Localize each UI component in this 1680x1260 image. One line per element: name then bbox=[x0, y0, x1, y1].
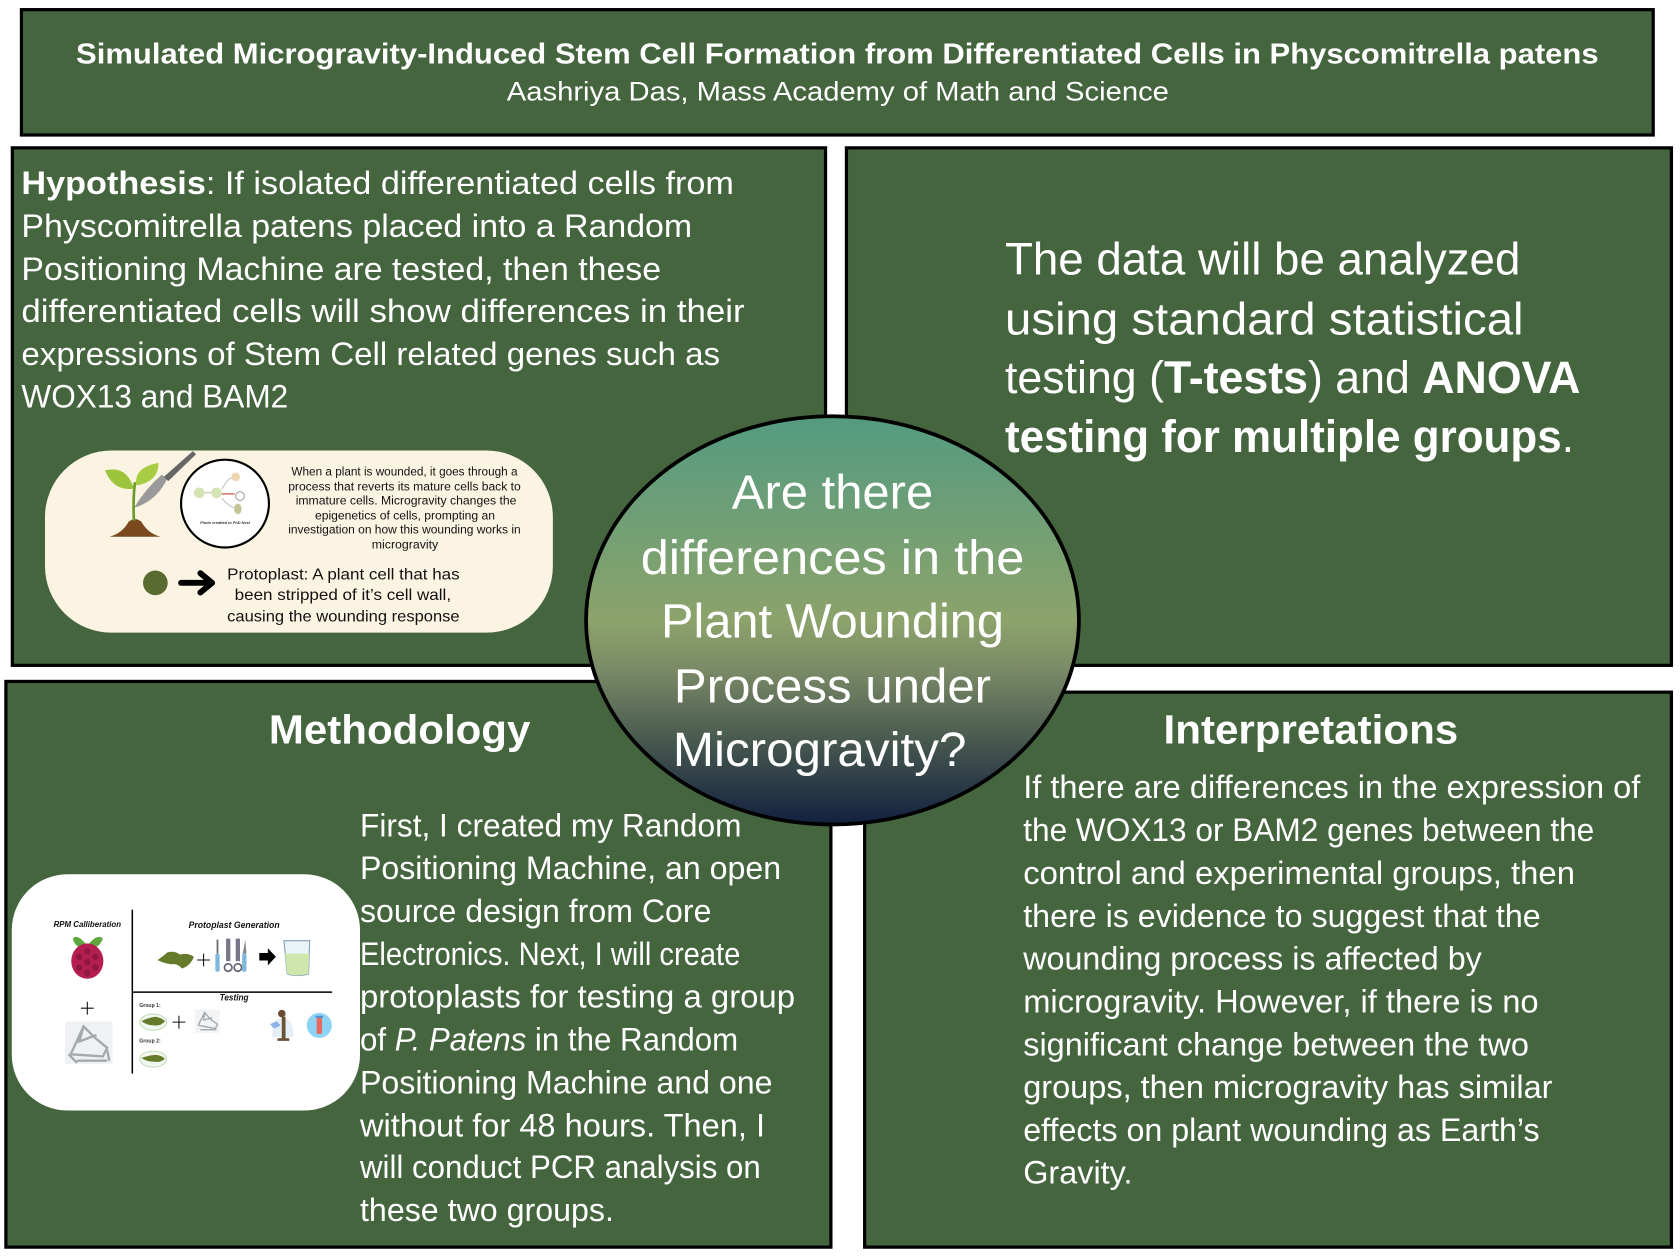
title: Simulated Microgravity-Induced Stem Cell Formation from Differentiated Cells in Physcomitrella patens bbox=[76, 39, 1599, 71]
icon: beaker bbox=[284, 941, 310, 976]
methodology text: these two groups. bbox=[360, 1192, 614, 1228]
wounding explanation text bbox=[288, 466, 521, 552]
wounding explanation text: process that reverts its mature cells back to bbox=[288, 481, 521, 494]
wounding explanation text: investigation on how this wounding works in bbox=[288, 524, 521, 537]
wounding explanation text: microgravity bbox=[372, 539, 438, 552]
data analysis text bbox=[1005, 233, 1580, 462]
interpretations text: wounding process is affected by bbox=[1022, 941, 1482, 977]
hypothesis text: Positioning Machine are tested, then these bbox=[21, 251, 661, 287]
data analysis text: testing (T-tests) and ANOVA bbox=[1005, 352, 1580, 403]
interpretations heading: Interpretations bbox=[1164, 707, 1458, 753]
icon: surgical tools bbox=[215, 939, 246, 972]
group 2 label: Group 2: bbox=[139, 1038, 161, 1044]
plus sign bbox=[81, 1002, 94, 1015]
wounding explanation text: immature cells. Microgravity changes the bbox=[296, 495, 517, 508]
methodology text: Positioning Machine, an open bbox=[360, 850, 781, 886]
panel: methodology bbox=[6, 681, 831, 1247]
central question text: Microgravity? bbox=[673, 723, 966, 777]
hypothesis text bbox=[21, 165, 745, 415]
plus sign bbox=[172, 1016, 185, 1029]
icon: seedling bbox=[105, 463, 161, 537]
header panel bbox=[21, 10, 1653, 135]
central question text: Plant Wounding bbox=[661, 595, 1004, 649]
hypothesis text: expressions of Stem Cell related genes such as bbox=[21, 336, 720, 372]
central question text bbox=[641, 465, 1024, 777]
icon: petri dish bbox=[140, 1014, 167, 1030]
data analysis text: The data will be analyzed bbox=[1005, 233, 1520, 284]
interpretations text: effects on plant wounding as Earth’s bbox=[1023, 1112, 1540, 1148]
author line: Aashriya Das, Mass Academy of Math and Science bbox=[507, 77, 1169, 107]
icon: small machine bbox=[195, 1009, 220, 1033]
methodology diagram card bbox=[12, 874, 360, 1111]
methodology text bbox=[359, 807, 795, 1228]
interpretations text: control and experimental groups, then bbox=[1023, 855, 1575, 891]
icon: moss bbox=[158, 952, 194, 969]
methodology text: without for 48 hours. Then, I bbox=[359, 1107, 765, 1143]
central question text: differences in the bbox=[641, 531, 1024, 585]
wounding explanation text: epigenetics of cells, prompting an bbox=[315, 510, 495, 523]
plus sign bbox=[197, 954, 210, 966]
panel: interpretations bbox=[865, 692, 1671, 1247]
wound healing diagram circle bbox=[181, 460, 269, 548]
interpretations text: the WOX13 or BAM2 genes between the bbox=[1023, 812, 1594, 848]
methodology text: Electronics. Next, I will create bbox=[360, 936, 740, 972]
wound healing diagram circle: Photo credited to PhD Nest bbox=[200, 521, 251, 525]
icon: scientist bbox=[270, 1010, 294, 1041]
protoplast definition: causing the wounding response bbox=[227, 607, 460, 625]
protoplast definition: Protoplast: A plant cell that has bbox=[227, 566, 460, 584]
methodology text: of P. Patens in the Random bbox=[360, 1022, 738, 1058]
wounding explanation text: When a plant is wounded, it goes through a bbox=[291, 466, 518, 479]
data analysis text: testing for multiple groups. bbox=[1005, 411, 1574, 462]
methodology text: Positioning Machine and one bbox=[360, 1064, 772, 1100]
interpretations text: groups, then microgravity has similar bbox=[1023, 1069, 1553, 1105]
methodology text: First, I created my Random bbox=[360, 807, 741, 843]
panel: data analysis bbox=[846, 148, 1671, 665]
interpretations text: there is evidence to suggest that the bbox=[1023, 898, 1541, 934]
icon: protoplast dot bbox=[143, 571, 168, 595]
interpretations text: If there are differences in the expression of bbox=[1023, 769, 1640, 805]
methodology text: source design from Core bbox=[360, 893, 711, 929]
icon: raspberry bbox=[71, 937, 103, 979]
RPM calibration label: RPM Calliberation bbox=[54, 919, 121, 929]
central question text: Are there bbox=[732, 465, 933, 519]
protoplast generation label: Protoplast Generation bbox=[189, 920, 280, 930]
icon: test tube bbox=[307, 1013, 332, 1038]
central question oval bbox=[586, 416, 1079, 824]
protoplast definition: been stripped of it’s cell wall, bbox=[235, 586, 451, 604]
testing label: Testing bbox=[220, 993, 249, 1003]
data analysis text: using standard statistical bbox=[1005, 293, 1524, 344]
interpretations text bbox=[1022, 769, 1640, 1190]
icon: scalpel bbox=[134, 451, 196, 508]
interpretations text: Gravity. bbox=[1023, 1154, 1132, 1190]
panel: hypothesis bbox=[12, 148, 826, 665]
hypothesis text: WOX13 and BAM2 bbox=[21, 379, 288, 415]
interpretations text: microgravity. However, if there is no bbox=[1023, 983, 1539, 1019]
arrow bbox=[259, 948, 276, 965]
methodology heading: Methodology bbox=[269, 707, 531, 753]
icon: petri dish bbox=[140, 1051, 167, 1067]
group 1 label: Group 1: bbox=[139, 1003, 161, 1009]
protoplast definition bbox=[227, 566, 460, 625]
hypothesis text: differentiated cells will show differences in their bbox=[21, 293, 745, 329]
hypothesis text: Physcomitrella patens placed into a Random bbox=[21, 208, 692, 244]
central question text: Process under bbox=[674, 659, 991, 713]
wounding explainer card bbox=[45, 451, 553, 633]
methodology text: protoplasts for testing a group bbox=[360, 979, 795, 1015]
arrow bbox=[181, 573, 212, 592]
hypothesis text: Hypothesis : If isolated differentiated cells from bbox=[21, 165, 734, 201]
interpretations text: significant change between the two bbox=[1023, 1026, 1529, 1062]
methodology text: will conduct PCR analysis on bbox=[359, 1149, 761, 1185]
icon: random positioning machine bbox=[65, 1022, 112, 1064]
